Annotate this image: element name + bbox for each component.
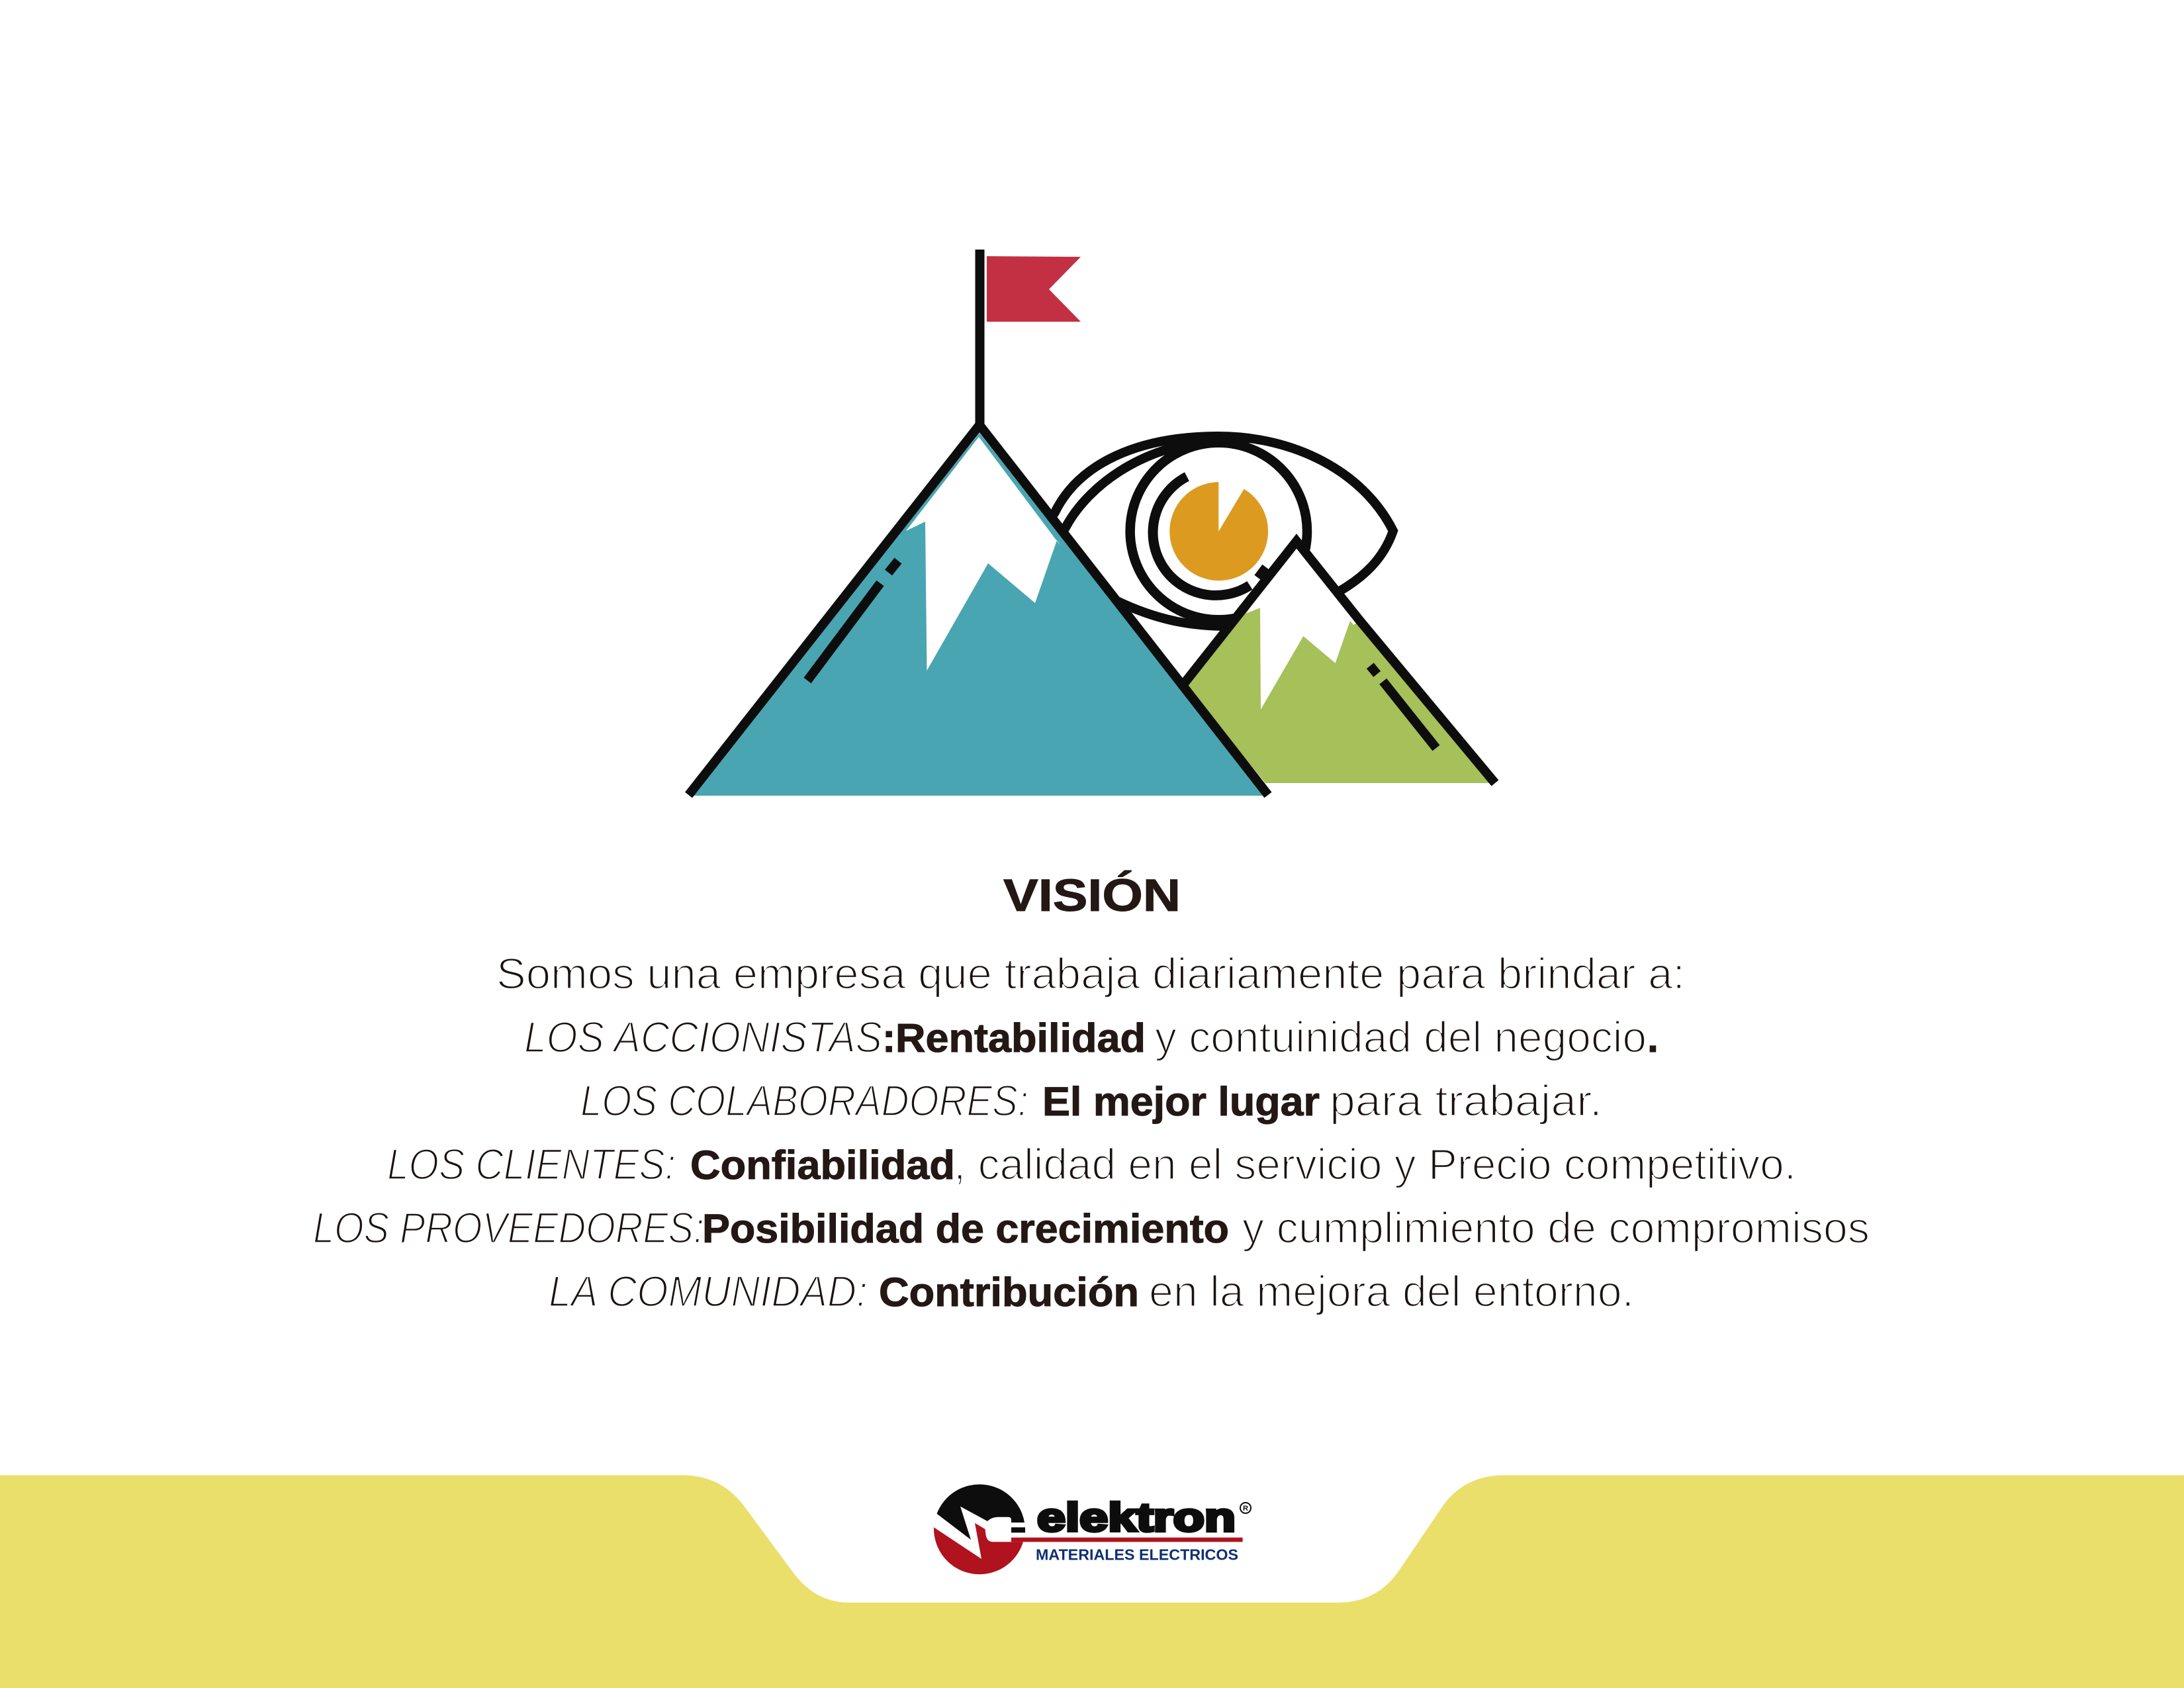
line: colaboradores: para trabajar. [1330, 1076, 1602, 1125]
line: proveedores: y cumplimiento de compromisos [1242, 1203, 1870, 1252]
line: accionistas: y contuinidad del negocio [1155, 1013, 1647, 1062]
icon: green mountain [1184, 541, 1495, 783]
logo: elektron [934, 1484, 1251, 1574]
illustration: mountains, flag and eye [688, 250, 1495, 796]
line: colaboradores: LOS COLABORADORES: [580, 1076, 1028, 1125]
intro line: Somos una empresa que trabaja diariamente para brindar a: [496, 949, 1685, 998]
line: comunidad: LA COMUNIDAD: [549, 1267, 868, 1316]
registered mark [1240, 1503, 1251, 1513]
footer band [0, 1475, 2184, 1688]
logo mark: plug and lightning [934, 1484, 1243, 1574]
line: colaboradores: El mejor lugar [1042, 1079, 1320, 1124]
line: clientes [387, 1140, 1796, 1189]
line: comunidad: Contribución [879, 1270, 1139, 1315]
registered mark: R [1243, 1505, 1248, 1513]
icon: teal mountain [688, 425, 1268, 796]
line: proveedores: Posibilidad de crecimiento [702, 1206, 1229, 1251]
logo tagline: MATERIALES ELECTRICOS [1036, 1546, 1238, 1564]
line: comunidad [549, 1267, 1634, 1316]
line: accionistas [524, 1013, 1659, 1062]
line: comunidad: en la mejora del entorno. [1149, 1267, 1634, 1316]
line: clientes: , calidad en el servicio y Precio competitivo. [954, 1140, 1796, 1189]
line: accionistas: . [1647, 1015, 1659, 1060]
text block: vision statement [313, 949, 1870, 1316]
line: clientes: Confiabilidad [690, 1143, 955, 1188]
line: accionistas: LOS ACCIONISTAS [524, 1013, 882, 1062]
logo wordmark: elektron [1037, 1495, 1236, 1540]
icon: eye [1052, 436, 1393, 626]
line: accionistas: : [882, 1015, 895, 1060]
line: proveedores: LOS PROVEEDORES: [313, 1203, 704, 1252]
icon: flag [976, 250, 1081, 426]
line: colaboradores [580, 1076, 1602, 1125]
line: accionistas: Rentabilidad [895, 1015, 1146, 1060]
line: proveedores [313, 1203, 1870, 1252]
line: clientes: LOS CLIENTES: [387, 1140, 676, 1189]
heading: VISIÓN [1003, 870, 1181, 921]
icon: eye pupil [1169, 482, 1268, 581]
